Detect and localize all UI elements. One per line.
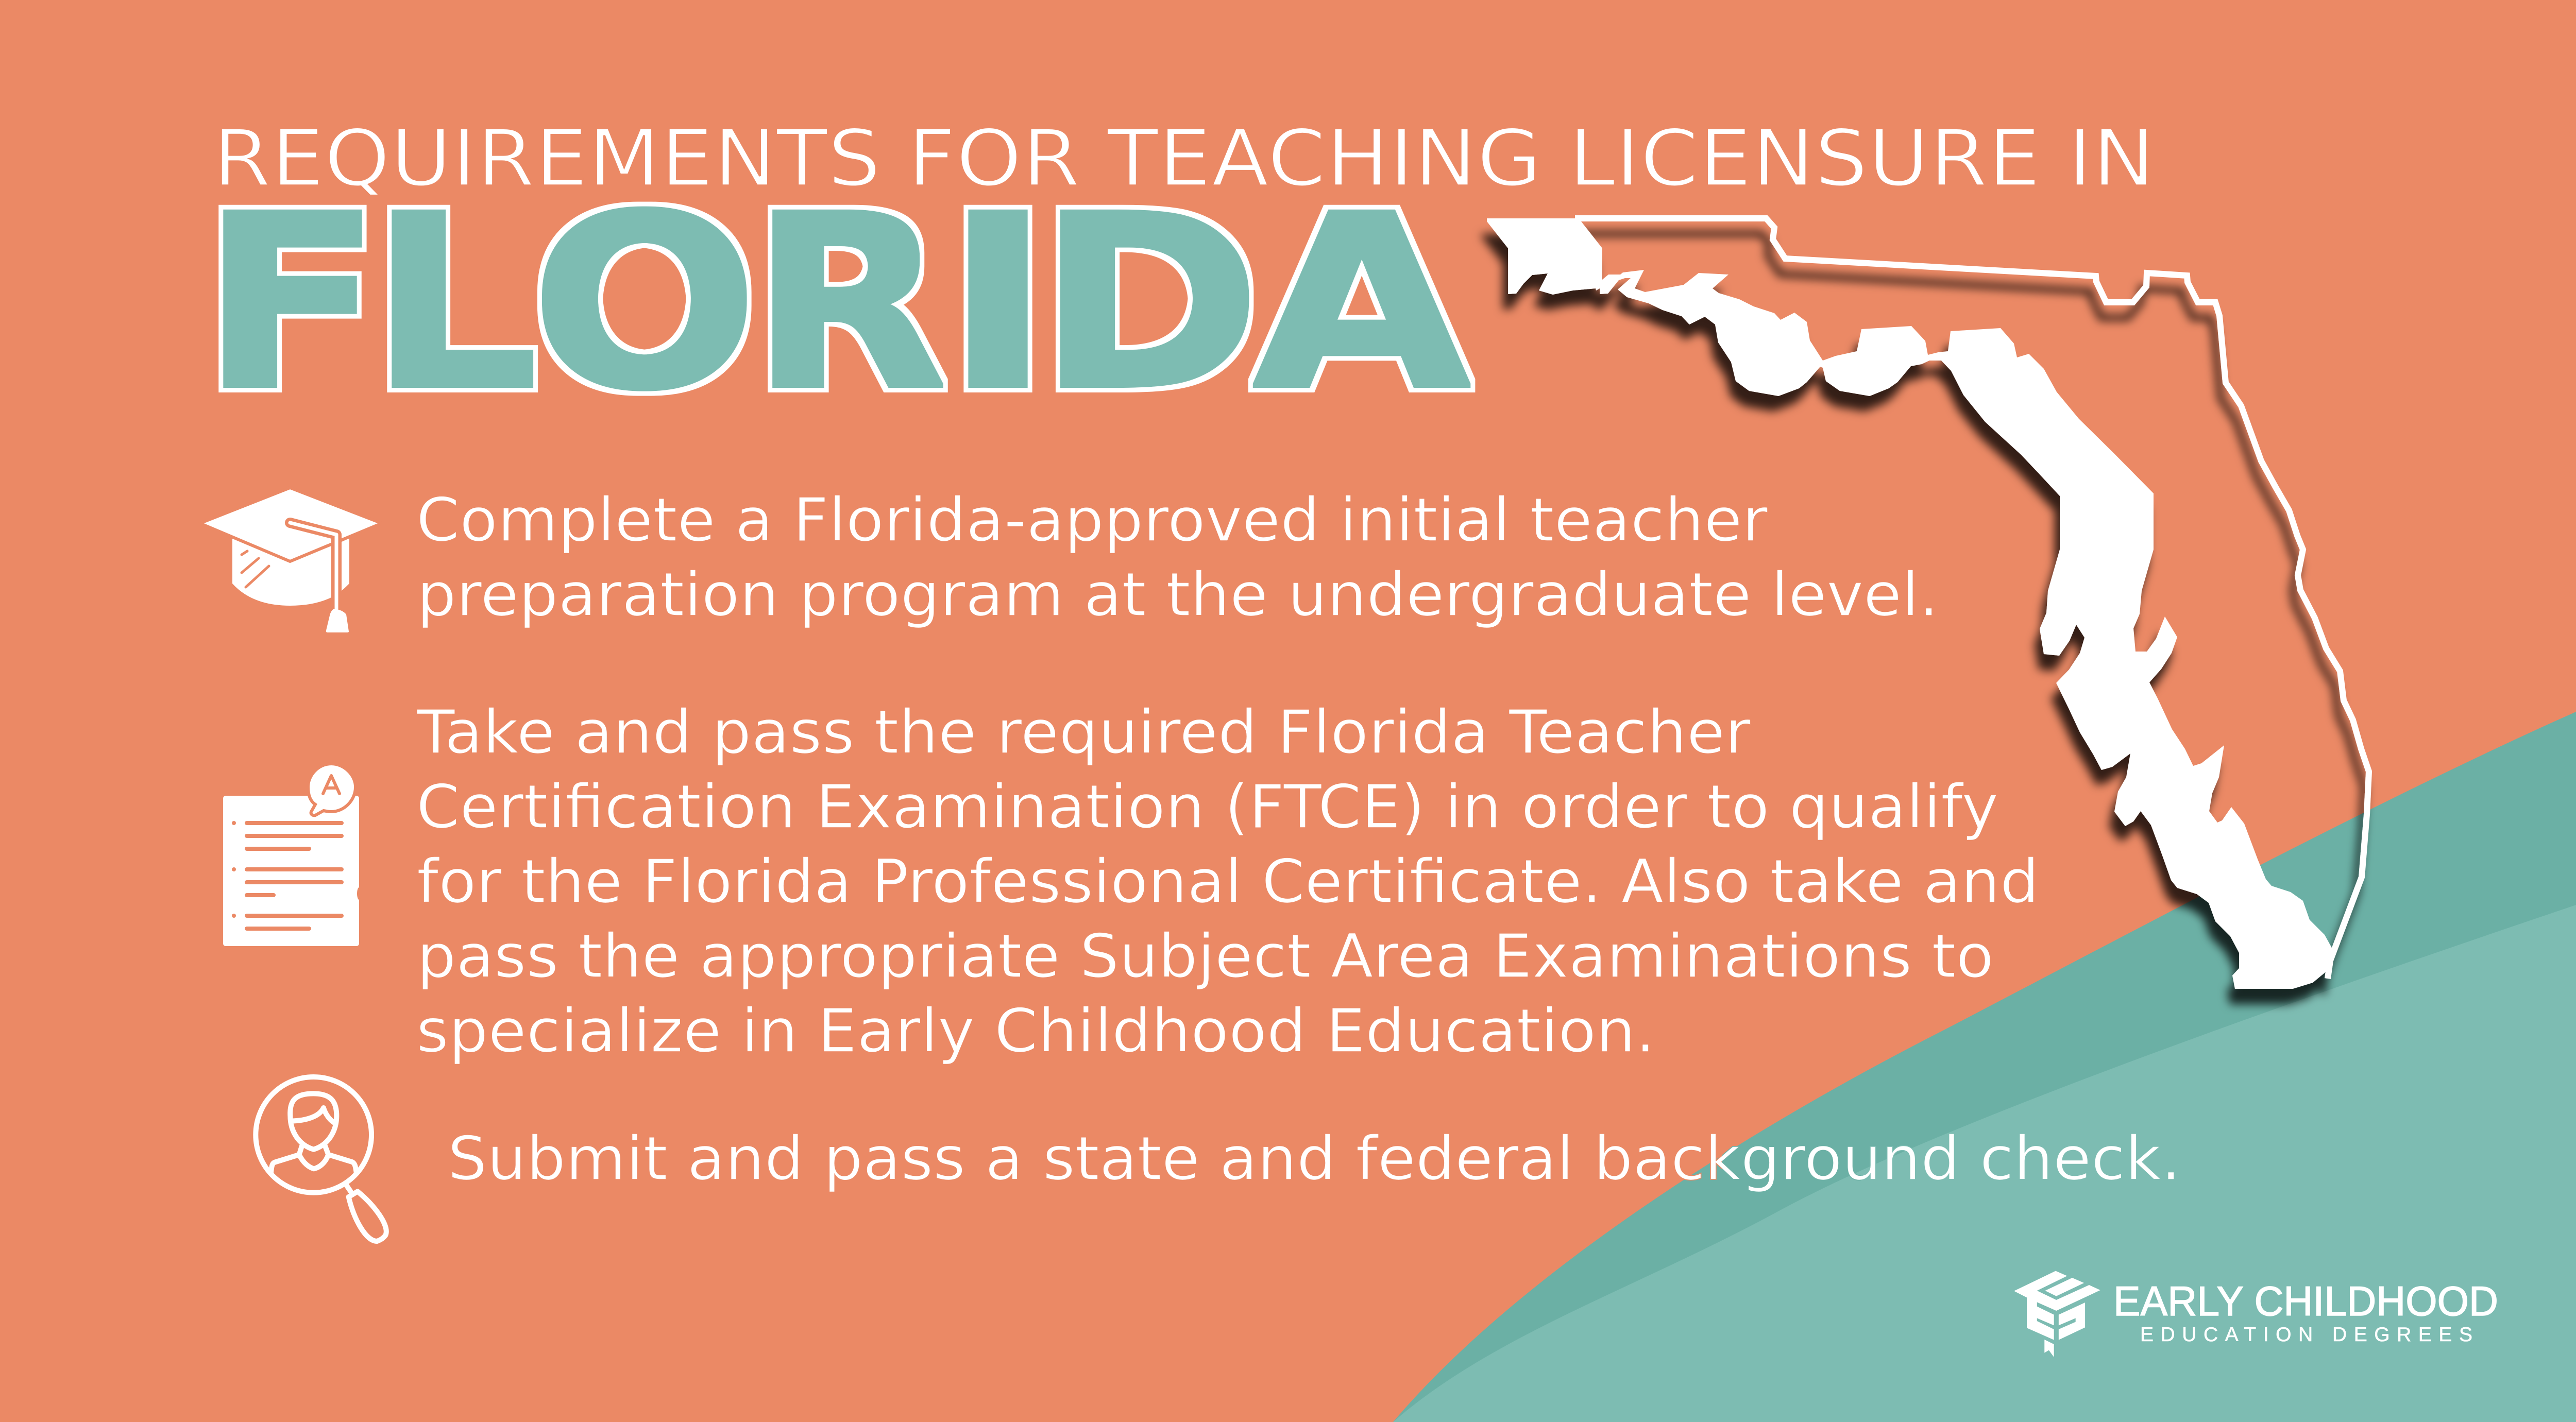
- text block: teacher preparation program: preparation program at the undergraduate level.: [417, 559, 1939, 630]
- background: light teal wave: [1393, 905, 2576, 1422]
- text block: examinations: pass the appropriate Subject Area Examinations to: [417, 921, 1994, 991]
- logo mark: [2014, 1271, 2100, 1357]
- map: state outline: [1575, 218, 2369, 979]
- text block: examinations: for the Florida Professional Certificate. Also take and: [417, 846, 2039, 917]
- title line: REQUIREMENTS FOR TEACHING LICENSURE IN: [213, 113, 2155, 204]
- logo: Early Childhood Education Degrees: [2014, 1271, 2498, 1357]
- heading: FLORIDA: R: [751, 164, 946, 442]
- background: dark teal wave: [1393, 712, 2576, 1422]
- icon: exam sheet with speech bubble: [223, 764, 361, 946]
- map: filled white shape: [1487, 218, 2333, 989]
- heading: FLORIDA: L: [369, 164, 538, 442]
- heading: FLORIDA: O: [531, 164, 758, 442]
- text block: examinations: specialize in Early Childhood Education.: [416, 996, 1655, 1066]
- logo tagline: EDUCATION DEGREES: [2140, 1324, 2472, 1346]
- heading: FLORIDA: F: [201, 164, 382, 442]
- icon: graduation cap: [200, 488, 382, 632]
- text block: examinations: Certification Examination (FTCE) in order to qualify: [416, 772, 1998, 842]
- logo wordmark: EARLY CHILDHOOD: [2113, 1278, 2498, 1325]
- Florida map with shadow: [1487, 218, 2369, 989]
- heading: FLORIDA: A: [1253, 164, 1472, 442]
- heading: FLORIDA: I: [943, 164, 1053, 442]
- heading: FLORIDA: D: [1038, 164, 1261, 442]
- text block: examinations: Take and pass the required Florida Teacher: [416, 697, 1751, 767]
- icon: person under magnifying glass: [256, 1077, 386, 1241]
- heading: FLORIDA: [201, 164, 1472, 442]
- text block: background check: Submit and pass a state and federal background check.: [448, 1123, 2181, 1194]
- text block: teacher preparation program: [416, 485, 1939, 630]
- text block: examinations: [416, 697, 2039, 1066]
- text block: teacher preparation program: Complete a Florida-approved initial teacher: [416, 485, 1768, 555]
